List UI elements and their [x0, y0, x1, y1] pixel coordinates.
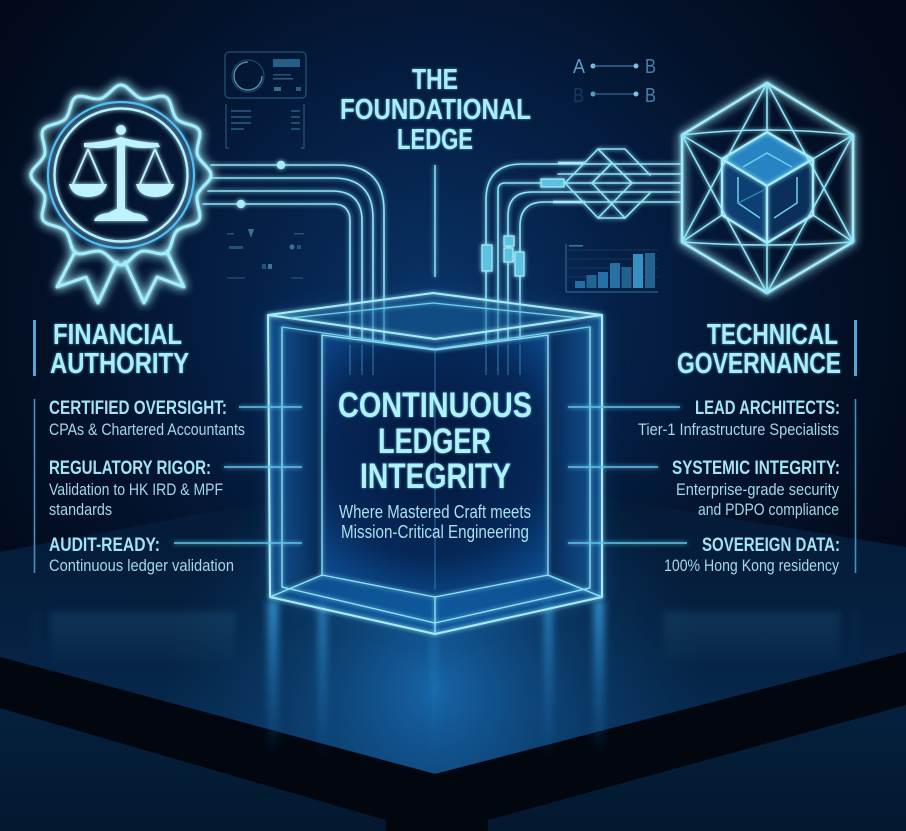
icon: badge with scales	[31, 85, 211, 303]
circuit modules	[482, 179, 564, 276]
cube edges	[268, 293, 602, 634]
item: lead architects: Tier-1 Infrastructure Specialists	[638, 420, 839, 439]
item: regulatory rigor: REGULATORY RIGOR:	[49, 458, 211, 479]
item: certified oversight	[49, 398, 245, 439]
item: audit-ready	[49, 535, 234, 575]
center heading	[338, 386, 532, 496]
heading: technical governance	[677, 319, 841, 380]
title: THE	[412, 64, 458, 96]
cube reflection on table	[268, 600, 604, 760]
center heading: LEDGER	[378, 422, 491, 461]
cube glow	[268, 293, 602, 634]
inner cube faces	[722, 132, 813, 243]
panel: financial authority	[33, 319, 245, 575]
inner hexagon	[722, 132, 813, 243]
A to B diagram: B	[645, 56, 656, 78]
ribbons	[57, 252, 184, 303]
star and spokes	[682, 83, 853, 293]
panel: technical governance	[638, 319, 857, 575]
text reflections on table	[35, 612, 856, 667]
item: systemic integrity: Enterprise-grade security	[676, 480, 839, 499]
item: regulatory rigor	[49, 458, 223, 519]
cube faces	[268, 293, 602, 634]
item: lead architects	[638, 398, 840, 439]
center subtitle	[339, 502, 531, 542]
title: FOUNDATIONAL	[340, 94, 531, 126]
scalloped badge outline	[31, 85, 211, 265]
icon: scales of justice	[69, 125, 174, 221]
item: audit-ready: Continuous ledger validation	[49, 556, 234, 575]
item: systemic integrity: SYSTEMIC INTEGRITY:	[672, 458, 840, 479]
pointer lines: left	[174, 407, 302, 543]
pointer lines: right	[568, 407, 687, 543]
innermost cube marks	[738, 153, 797, 218]
item: sovereign data: 100% Hong Kong residency	[664, 556, 839, 575]
title: LEDGE	[397, 124, 473, 156]
center heading: CONTINUOUS	[338, 386, 532, 425]
item: sovereign data: SOVEREIGN DATA:	[702, 535, 840, 556]
item: sovereign data	[664, 535, 840, 575]
badge rings	[48, 102, 194, 248]
A to B diagram: A	[573, 56, 586, 78]
item: systemic integrity	[672, 458, 840, 519]
heading: financial authority	[50, 319, 189, 380]
verticals seen through cube	[350, 345, 520, 375]
outer wire frame	[682, 83, 853, 293]
item: regulatory rigor: standards	[49, 500, 112, 519]
item: systemic integrity: and PDPO compliance	[698, 500, 839, 519]
bar chart	[566, 244, 658, 292]
glass cube	[268, 293, 602, 634]
faint dashboard widget	[225, 52, 306, 148]
circuit lines: left	[203, 161, 384, 345]
faint small data readouts	[227, 229, 304, 279]
A to B diagram: B	[645, 85, 656, 107]
heading: financial authority: FINANCIAL	[53, 319, 182, 351]
item: certified oversight: CPAs & Chartered Accountants	[49, 420, 245, 439]
title	[340, 64, 531, 156]
A to B diagram	[573, 56, 656, 107]
center subtitle: Mission-Critical Engineering	[341, 522, 529, 542]
heading: technical governance: TECHNICAL	[707, 319, 838, 351]
item: regulatory rigor: Validation to HK IRD & MPF	[49, 480, 223, 499]
A to B diagram: B	[573, 85, 584, 107]
heading: technical governance: GOVERNANCE	[677, 348, 841, 380]
item: certified oversight: CERTIFIED OVERSIGHT:	[49, 398, 227, 419]
circuit lines: right	[486, 163, 680, 345]
center pointer line	[434, 165, 436, 277]
table	[0, 470, 906, 831]
diamond connector	[565, 149, 650, 218]
icon: geometric hexagon polyhedron	[682, 83, 853, 293]
center heading: INTEGRITY	[360, 457, 511, 496]
heading: financial authority: AUTHORITY	[50, 348, 189, 380]
center subtitle: Where Mastered Craft meets	[339, 502, 531, 522]
item: audit-ready: AUDIT-READY:	[49, 535, 160, 556]
item: lead architects: LEAD ARCHITECTS:	[695, 398, 840, 419]
